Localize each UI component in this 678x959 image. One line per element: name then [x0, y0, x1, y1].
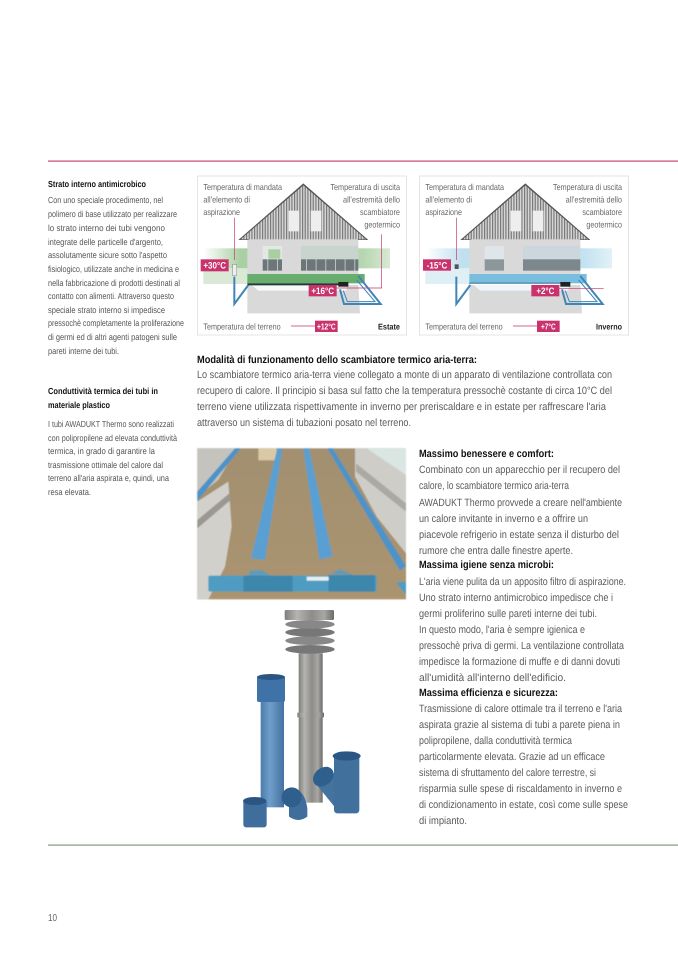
badge: +7°C: +7°C	[541, 322, 556, 332]
text block: hygiene: pressochè priva di germi. La ventilazione controllata	[419, 640, 624, 652]
text block: antimicrobial layer: nella fabbricazione di prodotti destinati al	[48, 278, 180, 288]
text block: antimicrobial layer: assolutamente sicure sotto l'aspetto	[48, 250, 167, 260]
text block: hygiene: Uno strato interno antimicrobico impedisce che i	[419, 592, 613, 604]
label: supply temperature	[425, 182, 504, 217]
text block: efficiency: di condizionamento in estate, così come sulle spese	[419, 799, 628, 811]
text block: comfort: rumore che entra dalle finestre aperte.	[419, 545, 573, 557]
label: outlet temperature: geotermico	[364, 220, 400, 230]
label: outlet temperature: scambiatore	[360, 207, 400, 217]
text block: antimicrobial layer: polimero di base utilizzato per realizzare	[48, 209, 177, 219]
panel: summer diagram	[197, 176, 407, 335]
text block: comfort: un calore invitante in inverno e a offrire un	[419, 513, 588, 525]
label: supply temperature: Temperatura di mandata	[203, 182, 282, 192]
label: supply temperature: aspirazione	[203, 207, 240, 217]
label: outlet temperature: all'estremità dello	[343, 194, 400, 204]
text block: antimicrobial layer: pareti interne dei tubi.	[48, 346, 119, 356]
text block: efficiency: particolarmente elevata. Grazie ad un efficace	[419, 751, 605, 763]
text block: efficiency: risparmia sulle spese di riscaldamento in inverno e	[419, 783, 622, 795]
text block: efficiency: Trasmissione di calore ottimale tra il terreno e l'aria	[419, 703, 622, 715]
text block: comfort	[419, 448, 622, 557]
blue pipe	[257, 674, 285, 807]
airflow band: summer	[203, 248, 390, 284]
text block: hygiene: In questo modo, l'aria è sempre igienica e	[419, 624, 585, 636]
season label: Estate: Estate	[378, 322, 400, 331]
text block: efficiency: di impianto.	[419, 815, 467, 827]
text block: antimicrobial layer: di germi ed di altri agenti patogeni sulle	[48, 332, 177, 342]
text block: antimicrobial layer: fisiologico, utilizzate anche in medicina e	[48, 264, 179, 274]
text block: efficiency	[419, 687, 628, 827]
badge: +30°C: +30°C	[203, 260, 226, 271]
label: outlet temperature: geotermico	[586, 220, 622, 230]
text block: thermal conductivity: terreno all'aria aspirata e, quindi, una	[48, 473, 169, 483]
text block: antimicrobial layer: pressochè completamente la proliferazione	[48, 318, 184, 328]
text block: antimicrobial layer: integrate delle particelle d'argento,	[48, 237, 163, 247]
text block: efficiency: sistema di sfruttamento del calore terrestre, si	[419, 767, 596, 779]
text block: hygiene: all'umidità all'interno dell'edificio.	[419, 672, 566, 684]
text block: thermal conductivity	[48, 419, 177, 497]
text block: comfort: AWADUKT Thermo provvede a creare nell'ambiente	[419, 497, 622, 509]
text block: antimicrobial layer: lo strato interno dei tubi vengono	[48, 223, 165, 233]
pipes: winter	[456, 276, 603, 304]
label: outlet temperature: Temperatura di uscita	[553, 182, 622, 192]
y fitting	[309, 751, 361, 813]
heading: operating mode: Modalità di funzionamento dello scambiatore termico aria-terra:	[197, 354, 477, 366]
coupling	[243, 797, 267, 827]
label: outlet temperature	[553, 182, 622, 230]
text block: efficiency: aspirata grazie al sistema di tubi a parete piena in	[419, 719, 620, 731]
text block: operating mode: Lo scambiatore termico aria-terra viene collegato a monte di un apparato di ventilazione controllata con	[197, 369, 612, 381]
text block: hygiene: Massima igiene senza microbi:	[419, 559, 554, 571]
text block: comfort: Combinato con un apparecchio per il recupero del	[419, 464, 620, 476]
temperature pointers	[234, 218, 382, 326]
heading: thermal conductivity: Conduttività termica dei tubi in	[48, 386, 158, 396]
text block: thermal conductivity: con polipropilene ad elevata conduttività	[48, 433, 177, 443]
text block: hygiene: germi proliferino sulle pareti interne dei tubi.	[419, 608, 597, 620]
text block: antimicrobial layer: speciale strato interno si impedisce	[48, 305, 165, 315]
page number: 10	[48, 913, 57, 924]
icon: house	[238, 183, 368, 313]
text block: operating mode: attraverso un sistema di tubazioni posato nel terreno.	[197, 417, 411, 429]
label: supply temperature: Temperatura di mandata	[425, 182, 504, 192]
label: outlet temperature: all'estremità dello	[566, 194, 622, 204]
panel: winter diagram	[419, 176, 629, 335]
heading: antimicrobial layer: Strato interno antimicrobico	[48, 179, 147, 189]
label: outlet temperature: Temperatura di uscita	[330, 182, 400, 192]
text block: operating mode	[197, 369, 612, 429]
text block: efficiency: polipropilene, dalla conduttività termica	[419, 735, 572, 747]
top rule	[48, 160, 678, 162]
ground temperature label: Temperatura del terreno	[425, 321, 503, 331]
pipes: summer	[234, 276, 381, 304]
temperature pointers	[456, 218, 604, 326]
text block: comfort: calore, lo scambiatore termico aria-terra	[419, 480, 569, 492]
panel: left column text	[48, 179, 184, 497]
photo: pipe components	[243, 610, 361, 827]
text block: thermal conductivity: resa elevata.	[48, 487, 91, 497]
text block: hygiene: impedisce la formazione di muffe e di danni dovuti	[419, 656, 620, 668]
text block: hygiene	[419, 559, 626, 684]
ground temperature label: Temperatura del terreno	[203, 321, 281, 331]
text block: antimicrobial layer: contatto con alimenti. Attraverso questo	[48, 291, 174, 301]
text block: antimicrobial layer	[48, 195, 184, 356]
badge: +12°C: +12°C	[317, 322, 336, 332]
badge: +2°C: +2°C	[536, 286, 554, 296]
text block: comfort: piacevole refrigerio in estate senza il disturbo del	[419, 529, 619, 541]
badge: +16°C: +16°C	[311, 286, 334, 296]
text block: thermal conductivity: trasmissione ottimale del calore dal	[48, 460, 163, 470]
season label: Inverno: Inverno	[596, 322, 622, 331]
label: supply temperature: all'elemento di	[203, 194, 250, 204]
text block: operating mode: terreno viene utilizzata rispettivamente in inverno per preriscaldare e in estate per raffrescare l'aria	[197, 401, 606, 413]
text block: comfort: Massimo benessere e comfort:	[419, 448, 554, 460]
heading: thermal conductivity: materiale plastico	[48, 400, 111, 410]
label: supply temperature: aspirazione	[425, 207, 462, 217]
heading: thermal conductivity	[48, 386, 158, 410]
icon: house	[460, 183, 590, 313]
text block: antimicrobial layer: Con uno speciale procedimento, nel	[48, 195, 163, 205]
text block: hygiene: L'aria viene pulita da un apposito filtro di aspirazione.	[419, 576, 626, 588]
text block: thermal conductivity: I tubi AWADUKT Thermo sono realizzati	[48, 419, 174, 429]
airflow band: winter	[425, 248, 612, 284]
elbow fitting	[282, 787, 307, 820]
steel air intake	[285, 610, 335, 803]
label: outlet temperature	[330, 182, 400, 230]
bottom rule	[48, 844, 678, 846]
text block: thermal conductivity: termica, in grado di garantire la	[48, 446, 155, 456]
label: supply temperature	[203, 182, 282, 217]
label: outlet temperature: scambiatore	[582, 207, 622, 217]
photo: pipes laid in trench	[197, 448, 406, 599]
text block: operating mode: recupero di calore. Il principio si basa sul fatto che la temperatura pressochè costante di circa 10°C del	[197, 385, 612, 397]
badge: -15°C: -15°C	[427, 260, 447, 270]
label: supply temperature: all'elemento di	[425, 194, 472, 204]
text block: efficiency: Massima efficienza e sicurezza:	[419, 687, 558, 699]
badge: +2°C	[531, 285, 559, 296]
